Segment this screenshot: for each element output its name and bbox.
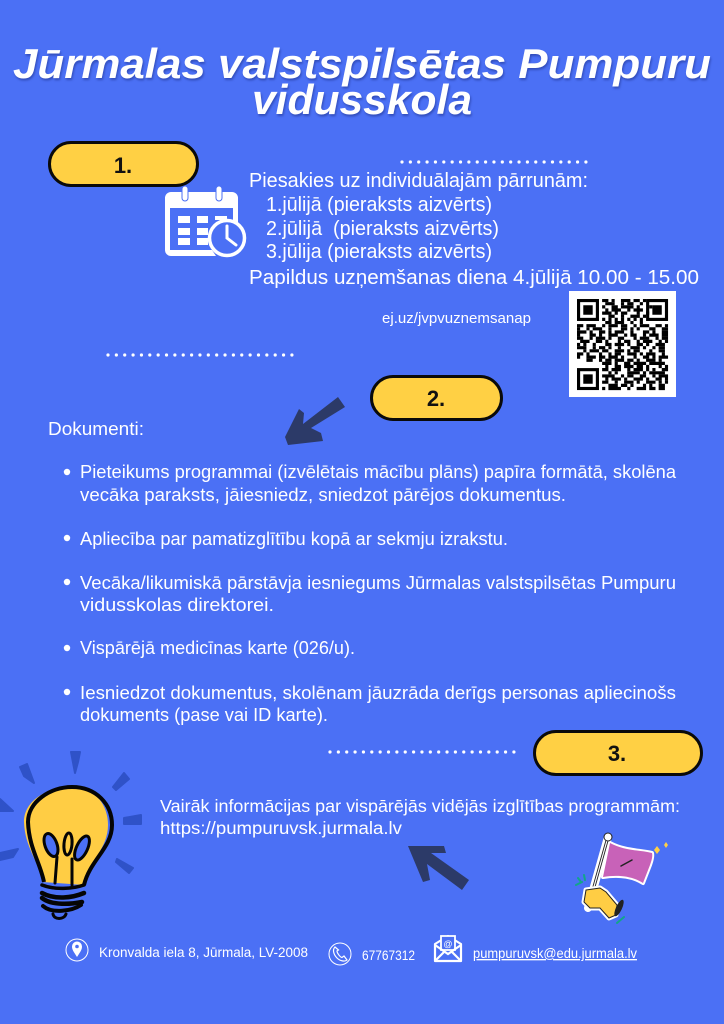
list item 1: vecāka paraksts, jāiesniedz, sniedzot pārējos dokumentus. — [80, 485, 566, 505]
QR code — [569, 291, 676, 397]
text block: interview dates: Piesakies uz individuālajām pārrunām: — [249, 170, 588, 192]
step badge 1: 1. — [114, 153, 132, 178]
list item 1: Pieteikums programmai (izvēlētais mācību plāns) papīra formātā, skolēna — [80, 462, 677, 482]
icon: location pin — [66, 939, 88, 961]
title: Jūrmalas valstspilsētas Pumpuru — [13, 40, 711, 87]
arrow: down-left to documents — [285, 397, 345, 445]
address: Kronvalda iela 8, Jūrmala, LV-2008 — [99, 945, 308, 960]
email address: pumpuruvsk@edu.jurmala.lv — [473, 946, 637, 961]
text block: interview dates: 1.jūlijā (pieraksts aizvērts) — [266, 194, 492, 216]
text block: interview dates — [249, 170, 699, 289]
list item 4: Vispārējā medicīnas karte (026/u). — [80, 638, 355, 658]
text block: interview dates: Papildus uzņemšanas diena 4.jūlijā 10.00 - 15.00 — [249, 267, 699, 289]
text block: more information: https://pumpuruvsk.jurmala.lv — [160, 818, 402, 838]
icon: phone — [329, 943, 351, 965]
phone number: 67767312 — [362, 948, 415, 963]
heading: documents: Dokumenti: — [48, 419, 144, 439]
icon: hand holding flag — [576, 833, 668, 923]
icon: envelope: @ — [443, 939, 453, 949]
title — [13, 40, 711, 123]
list item 5: dokuments (pase vai ID karte). — [80, 705, 328, 725]
icon: envelope — [435, 936, 461, 961]
list item 5: Iesniedzot dokumentus, skolēnam jāuzrāda derīgs personas apliecinošs — [80, 683, 676, 703]
icon: light bulb — [0, 752, 141, 918]
link label: ej.uz/jvpvuznemsanap — [382, 310, 531, 327]
list item 3: Vecāka/likumiskā pārstāvja iesniegums Jūrmalas valstspilsētas Pumpuru — [80, 573, 676, 593]
step badge 3 — [534, 732, 702, 774]
text block: interview dates: 3.jūlija (pieraksts aizvērts) — [266, 241, 492, 263]
footer: contact details — [66, 936, 637, 965]
step badge 2: 2. — [427, 386, 445, 411]
step badge 3: 3. — [608, 741, 626, 766]
list item 3: vidusskolas direktorei. — [80, 595, 274, 615]
icon: calendar with clock — [165, 186, 244, 256]
list item 3 — [64, 573, 676, 615]
title: vidusskola — [252, 76, 472, 123]
text block: interview dates: 2.jūlijā (pieraksts aizvērts) — [266, 218, 499, 240]
text block: more information: Vairāk informācijas par vispārējās vidējās izglītības programmām: — [160, 796, 680, 816]
text block: more information — [160, 796, 680, 838]
list item 1 — [64, 462, 677, 505]
list item 2: Apliecība par pamatizglītību kopā ar sekmju izrakstu. — [80, 529, 508, 549]
step badge 1 — [50, 142, 198, 186]
step badge 2 — [372, 376, 502, 420]
arrow: up-left to link — [408, 846, 469, 890]
list item 5 — [64, 683, 676, 725]
list: required documents — [64, 462, 677, 725]
